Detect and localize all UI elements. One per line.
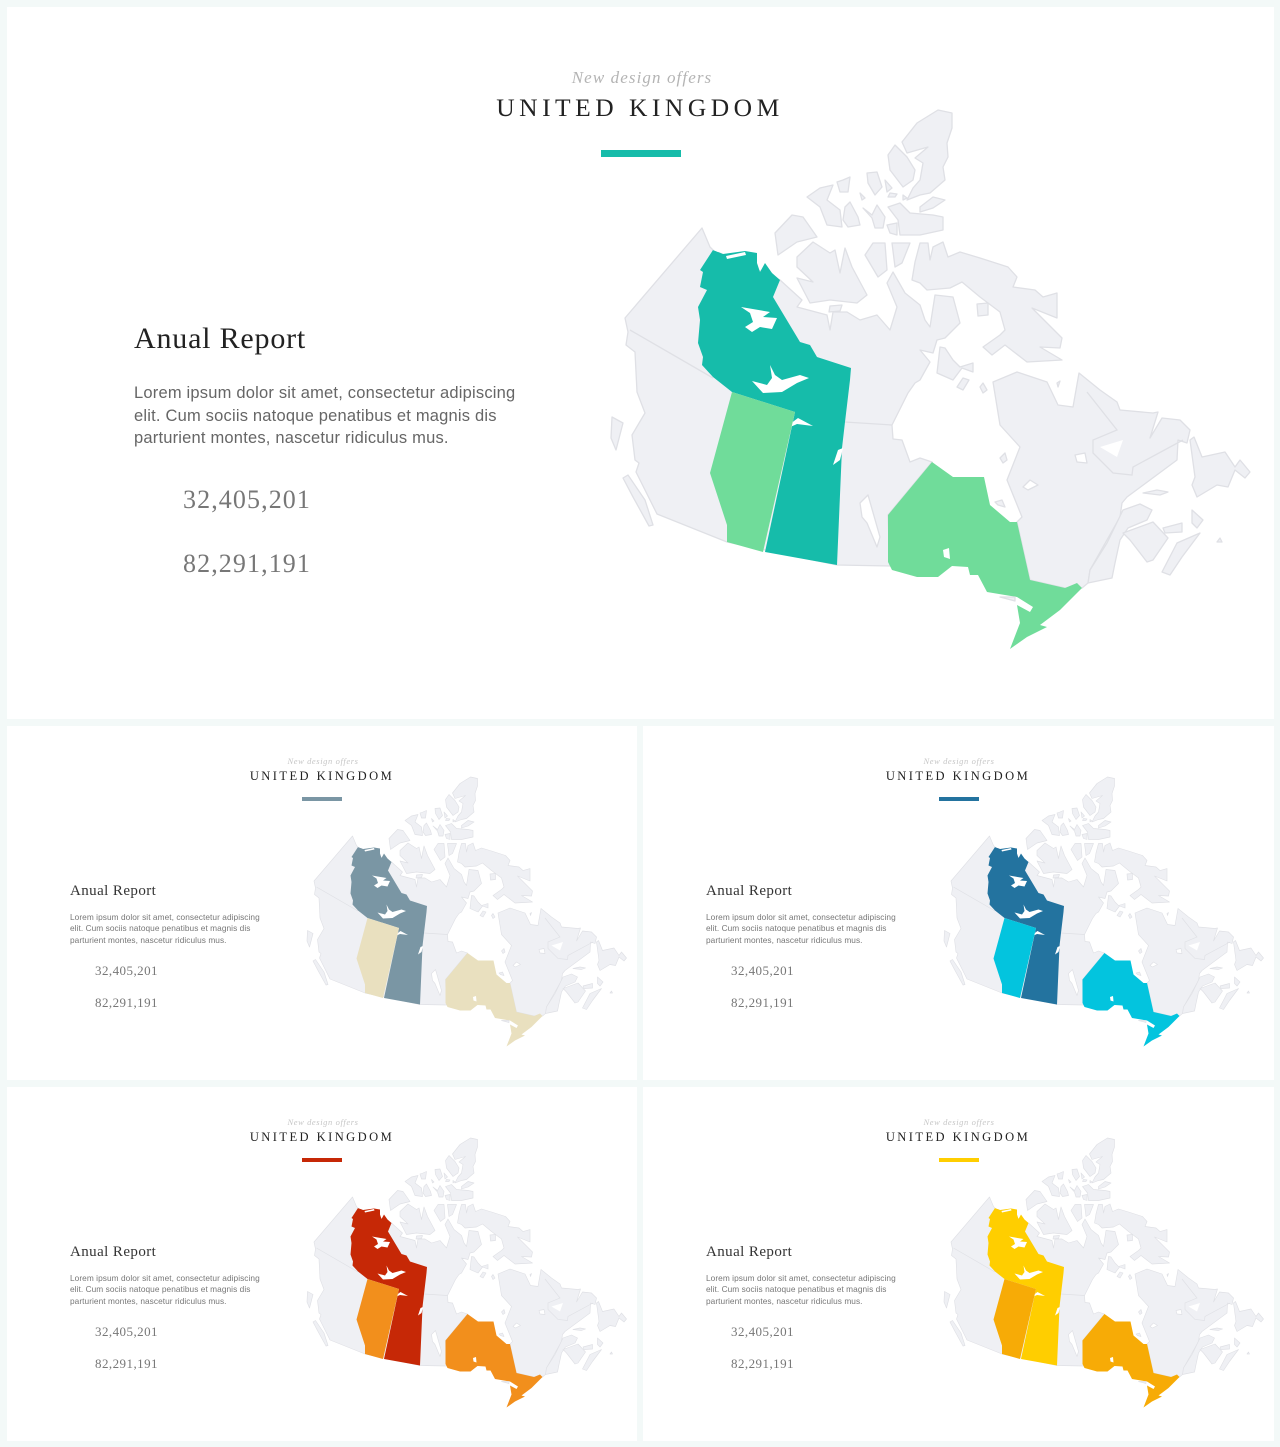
- body text: elit. Cum sociis natoque penatibus et magnis dis: [134, 407, 497, 425]
- number: 32,405,201: 32,405,201: [183, 485, 311, 514]
- body text: elit. Cum sociis natoque penatibus et magnis dis: [706, 923, 886, 933]
- heading: Anual Report: [706, 1244, 792, 1260]
- body text: [706, 912, 896, 945]
- subtitle: New design offers: [287, 756, 359, 766]
- number 2: 82,291,191: [731, 995, 794, 1010]
- panel: main featured slide: [7, 7, 1274, 719]
- number 1: 32,405,201: [731, 1324, 794, 1339]
- title: UNITED KINGDOM: [250, 1130, 394, 1144]
- heading: Anual Report: [70, 883, 156, 899]
- number 1: 32,405,201: [731, 963, 794, 978]
- body text: elit. Cum sociis natoque penatibus et magnis dis: [70, 923, 250, 933]
- body text: [70, 1273, 260, 1306]
- body text: Lorem ipsum dolor sit amet, consectetur adipiscing: [134, 384, 515, 402]
- panel: blue and cyan variant: [643, 726, 1274, 1080]
- subtitle: New design offers: [287, 1117, 359, 1127]
- number 2: 82,291,191: [95, 1356, 158, 1371]
- body text: parturient montes, nascetur ridiculus mus.: [706, 935, 863, 945]
- accent bar: [939, 1158, 979, 1162]
- body text: elit. Cum sociis natoque penatibus et magnis dis: [706, 1284, 886, 1294]
- body text: parturient montes, nascetur ridiculus mus.: [134, 429, 449, 447]
- accent bar: [302, 797, 342, 801]
- number 2: 82,291,191: [95, 995, 158, 1010]
- map: yellow and amber regions: [944, 1138, 1264, 1408]
- subtitle: New design offers: [923, 1117, 995, 1127]
- panel: slate and sand variant: [7, 726, 637, 1080]
- number: 82,291,191: 82,291,191: [183, 549, 311, 578]
- number 1: 32,405,201: [95, 963, 158, 978]
- body text: elit. Cum sociis natoque penatibus et magnis dis: [70, 1284, 250, 1294]
- number 1: 32,405,201: [95, 1324, 158, 1339]
- panel: yellow and amber variant: [643, 1087, 1274, 1441]
- map: slate and sand regions: [306, 776, 627, 1046]
- accent bar: [939, 797, 979, 801]
- body text: Lorem ipsum dolor sit amet, consectetur adipiscing: [706, 912, 896, 922]
- title: UNITED KINGDOM: [250, 769, 394, 783]
- title: UNITED KINGDOM: [886, 769, 1030, 783]
- accent bar: [302, 1158, 342, 1162]
- body text: [706, 1273, 896, 1306]
- heading: Anual Report: Anual Report: [134, 322, 306, 355]
- body text: [134, 384, 515, 447]
- map: red and orange regions: [306, 1138, 627, 1408]
- body text: Lorem ipsum dolor sit amet, consectetur adipiscing: [706, 1273, 896, 1283]
- number 2: 82,291,191: [731, 1356, 794, 1371]
- body text: [70, 912, 260, 945]
- title: UNITED KINGDOM: [886, 1130, 1030, 1144]
- body text: parturient montes, nascetur ridiculus mus.: [70, 935, 227, 945]
- accent bar: [601, 150, 681, 157]
- subtitle: New design offers: [572, 68, 712, 87]
- body text: Lorem ipsum dolor sit amet, consectetur adipiscing: [70, 912, 260, 922]
- heading: Anual Report: [70, 1244, 156, 1260]
- title: UNITED KINGDOM: [496, 93, 784, 122]
- map: blue and cyan regions: [944, 776, 1264, 1046]
- body text: Lorem ipsum dolor sit amet, consectetur adipiscing: [70, 1273, 260, 1283]
- panel: red and orange variant: [7, 1087, 637, 1441]
- body text: parturient montes, nascetur ridiculus mus.: [706, 1296, 863, 1306]
- heading: Anual Report: [706, 883, 792, 899]
- subtitle: New design offers: [923, 756, 995, 766]
- map: Canada with teal and green highlighted regions: [610, 110, 1250, 649]
- body text: parturient montes, nascetur ridiculus mus.: [70, 1296, 227, 1306]
